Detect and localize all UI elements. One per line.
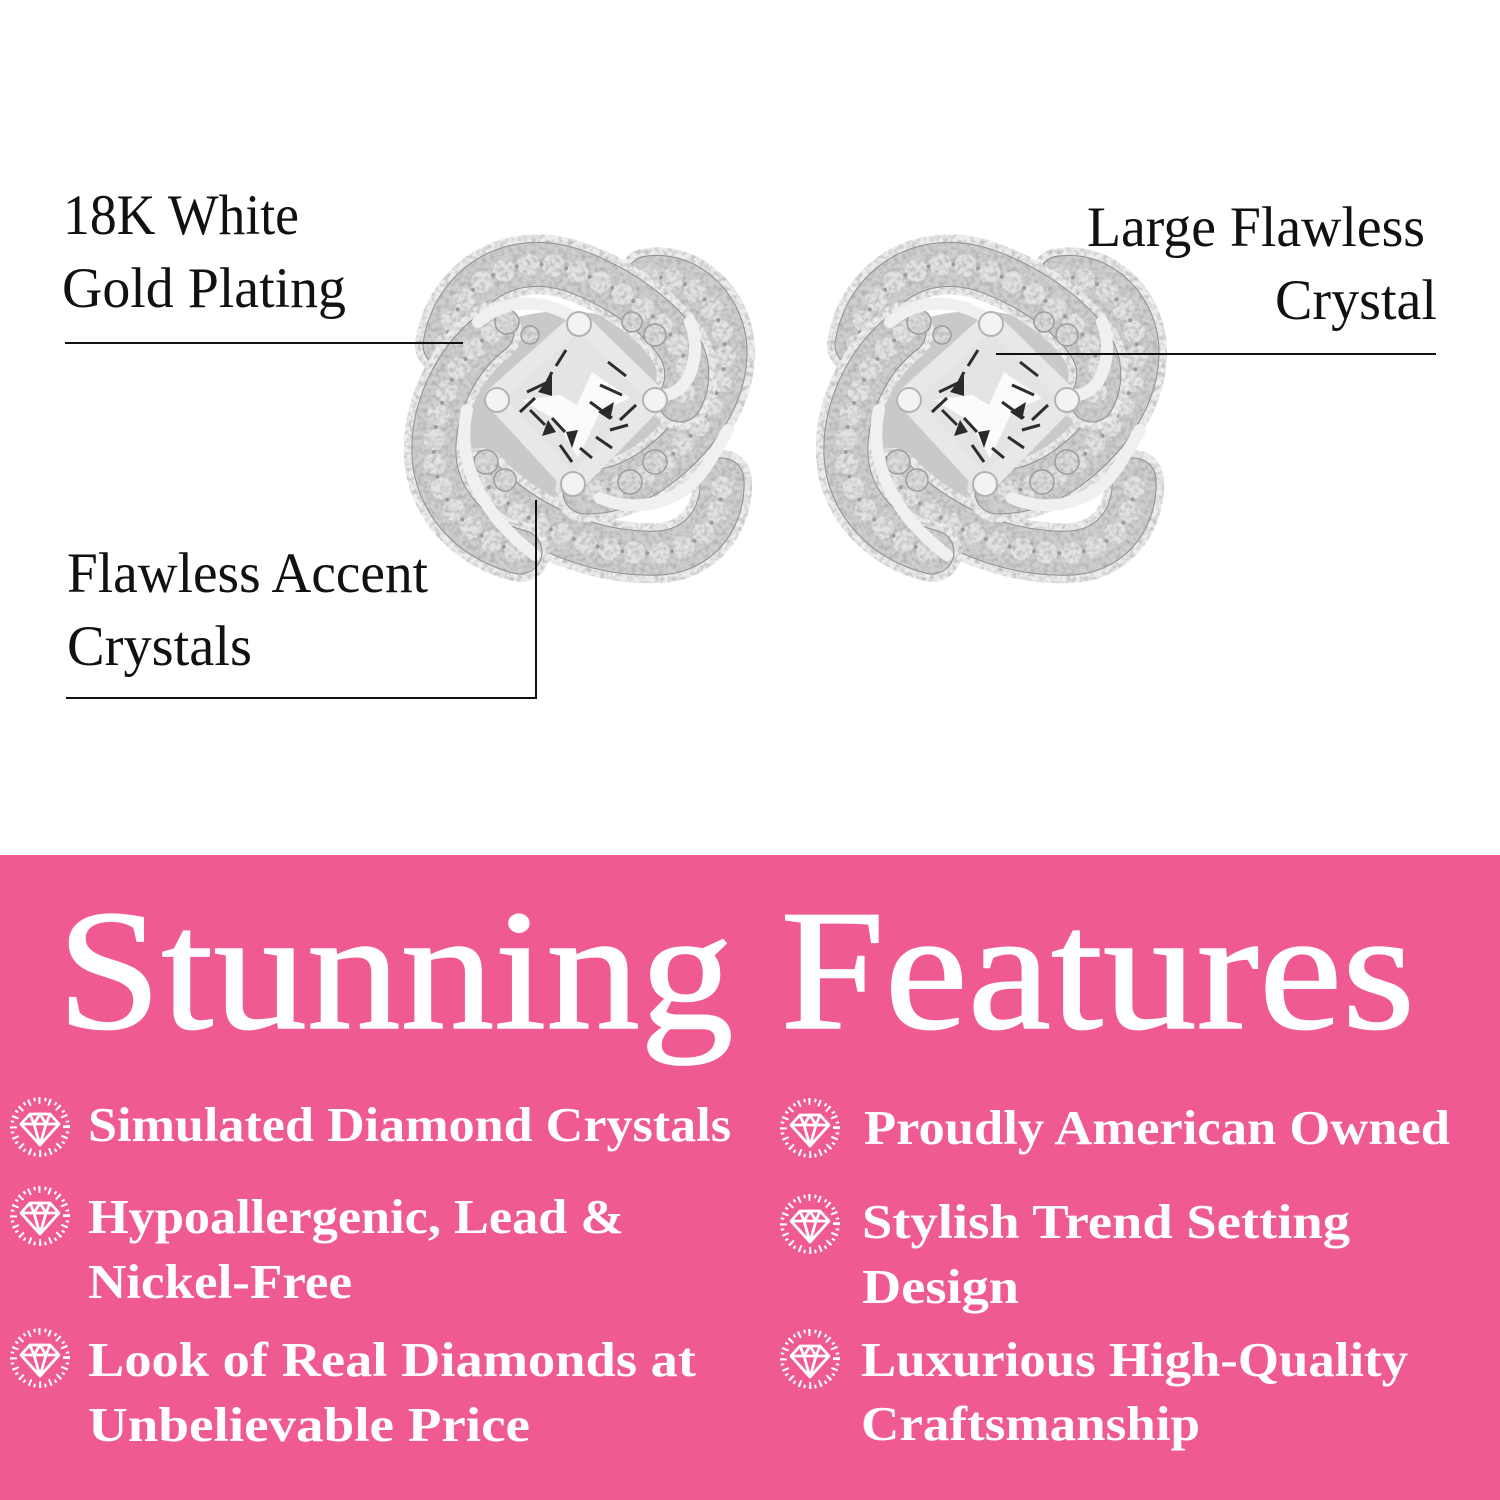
feature: proudly american owned: Proudly American Owned	[864, 1100, 1450, 1155]
panel: stunning features	[0, 855, 1500, 1500]
feature: luxurious craftsmanship: Craftsmanship	[861, 1396, 1200, 1451]
feature: look of real diamonds: Look of Real Diamonds at	[88, 1332, 697, 1387]
feature: look of real diamonds: Unbelievable Price	[88, 1397, 530, 1452]
callout: large flawless crystal	[996, 196, 1437, 354]
feature: stylish trend setting design: Design	[862, 1259, 1019, 1314]
feature: simulated diamond crystals: Simulated Diamond Crystals	[88, 1097, 731, 1152]
callout: flawless accent crystals: Crystals	[67, 615, 252, 678]
feature: stylish trend setting design	[782, 1194, 1351, 1314]
callout: large flawless crystal: Crystal	[1275, 269, 1437, 332]
product photo: right earring	[846, 264, 1140, 555]
feature: hypoallergenic	[12, 1188, 624, 1309]
feature: hypoallergenic: Hypoallergenic, Lead &	[88, 1189, 624, 1244]
callout: 18K white gold plating	[62, 184, 463, 343]
feature: look of real diamonds	[12, 1330, 697, 1452]
feature: luxurious craftsmanship: Luxurious High-Quality	[861, 1332, 1409, 1387]
callout: flawless accent crystals: Flawless Accent	[67, 542, 428, 605]
callout: 18K white gold plating: Gold Plating	[62, 257, 346, 320]
feature: luxurious craftsmanship	[782, 1331, 1409, 1451]
product photo: left earring	[434, 264, 728, 555]
callout: large flawless crystal: Large Flawless	[1087, 196, 1425, 259]
heading: Stunning Features	[57, 876, 1415, 1066]
callout: 18K white gold plating: 18K White	[63, 184, 299, 247]
feature: hypoallergenic: Nickel-Free	[88, 1254, 352, 1309]
feature: stylish trend setting design: Stylish Trend Setting	[862, 1194, 1351, 1249]
callout: flawless accent crystals	[66, 500, 536, 698]
